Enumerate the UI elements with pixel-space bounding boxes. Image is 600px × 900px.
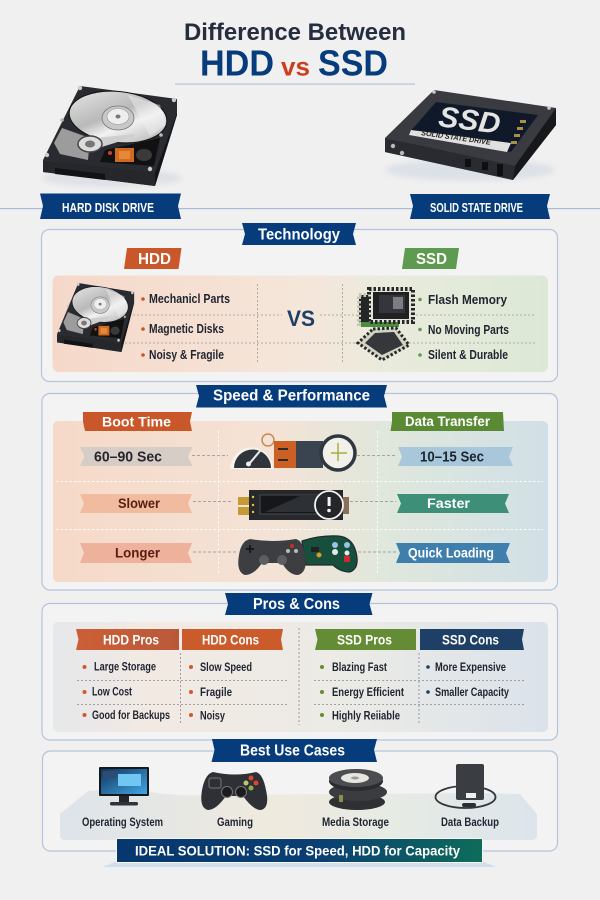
- icon: monitor: [99, 767, 149, 806]
- HDD technology list: [141, 292, 230, 362]
- panel: pros and cons: [42, 593, 558, 740]
- SSD pros list: Highly Reiiable: [332, 710, 400, 722]
- heading: Technology: Technology: [258, 226, 340, 244]
- heading: Best Use Cases: Best Use Cases: [240, 742, 345, 760]
- heading: Technology: [242, 223, 356, 245]
- icon: ssd module with alert: [238, 490, 349, 520]
- banner: Hard Disk Drive: HARD DISK DRIVE: [62, 200, 154, 215]
- SSD cons list: Smaller Capacity: [435, 687, 509, 699]
- HDD technology list: Noisy & Fragile: [149, 348, 224, 362]
- value ribbon: Slower: [80, 494, 192, 513]
- icon: memory chips: [358, 289, 413, 360]
- HDD cons list: [189, 662, 252, 722]
- label: media storage: Media Storage: [322, 817, 389, 829]
- panel: best use cases: [42, 739, 558, 851]
- SSD pros list: Blazing Fast: [332, 662, 387, 674]
- SSD pros list: [320, 662, 404, 722]
- SSD cons list: [426, 662, 509, 699]
- icon: solid state drive: SOLID STATE DRIVE: [421, 128, 492, 147]
- HDD technology list: Magnetic Disks: [149, 322, 224, 336]
- icon: solid state drive: [385, 90, 556, 181]
- icon: small hard disk: [57, 283, 134, 352]
- value ribbon: 60-90 Sec: 60–90 Sec: [94, 448, 162, 466]
- use case: data backup: [436, 764, 499, 829]
- inner band: [53, 421, 548, 582]
- title line: HDD vs SSD: vs: [281, 52, 310, 82]
- label: VS: VS: [287, 306, 315, 331]
- title line: HDD vs SSD: SSD: [318, 42, 388, 84]
- HDD pros list: Good for Backups: [92, 710, 170, 722]
- label: data backup: Data Backup: [441, 817, 499, 829]
- SSD technology list: Silent & Durable: [428, 348, 508, 362]
- header: HDD Cons: [182, 629, 283, 650]
- SSD cons list: More Expensive: [435, 662, 506, 674]
- SSD technology list: [418, 293, 509, 362]
- value ribbon: Slower: Slower: [118, 495, 161, 511]
- value ribbon: Faster: Faster: [427, 495, 471, 511]
- title line: HDD vs SSD: [200, 42, 388, 84]
- header: SSD Cons: [420, 629, 524, 650]
- value ribbon: Longer: [80, 543, 192, 563]
- tag: SSD: SSD: [416, 251, 447, 268]
- title block: [175, 19, 415, 85]
- column header: Data Transfer: Data Transfer: [405, 414, 491, 429]
- banner: Hard Disk Drive: [40, 194, 181, 219]
- tag: HDD: HDD: [138, 251, 171, 268]
- tag: SSD: [402, 248, 459, 269]
- value ribbon: 60-90 Sec: [80, 447, 192, 466]
- panel: technology: [42, 223, 558, 382]
- heading: Best Use Cases: [212, 739, 377, 762]
- HDD cons list: Noisy: [200, 710, 225, 722]
- HDD pros list: Large Storage: [94, 662, 156, 674]
- value ribbon: Longer: Longer: [115, 544, 161, 560]
- heading: Speed and Performance: Speed & Performance: [213, 388, 370, 404]
- header: HDD Cons: HDD Cons: [202, 632, 259, 648]
- tag: HDD: [124, 248, 182, 269]
- use case: media storage: [322, 769, 389, 829]
- icon: game controllers: [238, 536, 357, 575]
- icon: solid state drive: SSD: [437, 101, 502, 141]
- icon: disk stack: [329, 769, 387, 810]
- value ribbon: 10-15 Sec: 10–15 Sec: [420, 448, 484, 466]
- heading: Pros and Cons: [225, 593, 372, 615]
- HDD cons list: Fragile: [200, 687, 232, 699]
- header: SSD Pros: SSD Pros: [337, 632, 392, 648]
- title line: Difference Between: Difference Between: [184, 19, 406, 46]
- column header: Boot Time: [83, 412, 192, 431]
- icon: external drive: [436, 764, 496, 808]
- icon: hard disk drive: [42, 86, 182, 187]
- HDD pros list: [82, 662, 170, 722]
- header: HDD Pros: [76, 629, 179, 650]
- header: SSD Pros: [315, 629, 416, 650]
- HDD pros list: Low Cost: [92, 686, 132, 698]
- title line: HDD vs SSD: HDD: [200, 42, 274, 84]
- icon: gamepad: [201, 772, 267, 810]
- header: SSD Cons: SSD Cons: [442, 632, 499, 648]
- use case: operating system: [82, 767, 163, 829]
- column header: Data Transfer: [390, 412, 504, 431]
- banner: Solid State Drive: [410, 194, 550, 219]
- value ribbon: Quick Loading: [396, 543, 510, 563]
- icon: boot gauge and clock: [230, 434, 355, 470]
- heading: Pros and Cons: Pros & Cons: [253, 596, 340, 613]
- HDD technology list: Mechanicl Parts: [149, 292, 230, 306]
- panel: speed and performance: [42, 385, 558, 590]
- callout: ideal solution: [103, 838, 496, 867]
- heading: Speed and Performance: [196, 385, 387, 408]
- header: HDD Pros: HDD Pros: [103, 632, 159, 648]
- value ribbon: Faster: [397, 494, 509, 513]
- comparison band: [52, 276, 548, 372]
- HDD cons list: Slow Speed: [200, 662, 252, 674]
- column header: Boot Time: Boot Time: [102, 414, 171, 430]
- banner: Solid State Drive: SOLID STATE DRIVE: [430, 200, 523, 215]
- platform band: [60, 790, 537, 840]
- label: gaming: Gaming: [217, 817, 253, 829]
- use case: gaming: [201, 772, 267, 829]
- SSD technology list: No Moving Parts: [428, 323, 509, 337]
- callout: ideal solution: IDEAL SOLUTION: SSD for Speed, HDD for Capacity: [135, 842, 460, 858]
- horizontal rule behind drive banners: [0, 208, 600, 209]
- value ribbon: 10-15 Sec: [398, 447, 513, 466]
- value ribbon: Quick Loading: Quick Loading: [408, 544, 494, 560]
- label: operating system: Operating System: [82, 817, 163, 829]
- inner band: [53, 622, 548, 732]
- SSD technology list: Flash Memory: [428, 293, 507, 307]
- SSD pros list: Energy Efficient: [332, 687, 404, 699]
